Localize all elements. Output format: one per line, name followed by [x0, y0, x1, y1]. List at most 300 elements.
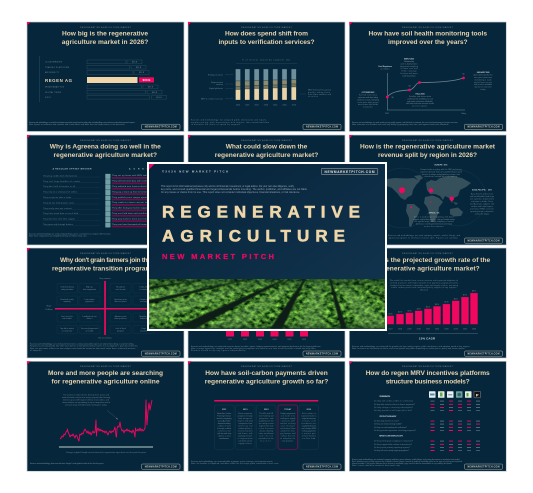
quadrant matrix: Uncertain price — [114, 298, 127, 301]
footnote: grain farmers: of adoption. — [30, 349, 42, 352]
line chart: tool improvement: $4 — [408, 86, 411, 88]
callout: Europe: corporate demand. Soil rules and food buyers push — [420, 170, 462, 173]
footnote: Agreena: Note: these comparisons are simplified and may not reflect every case. — [29, 234, 88, 238]
callout: Asia-Pacific: and lower MRV costs for — [470, 208, 494, 210]
timeline cards: farmers for storing — [218, 422, 231, 425]
footnote: spend shift: Sources and methodology: we analyzed public disclosures and reports, — [191, 119, 268, 122]
bar chart: market comparison: $XX B — [132, 62, 138, 64]
bar chart: market growth: 2034 — [454, 329, 458, 331]
footnote: grain farmers: Note: the placement reflects our own analysis and should be treated as directional rather than a statistical measure. — [30, 347, 136, 350]
quadrant matrix: Not so common — [98, 337, 112, 340]
panel: Agreena comparison — [27, 135, 184, 245]
heading: Agreena: Why is Agreena doing so well in the — [50, 144, 161, 151]
timeline cards: and service — [259, 434, 273, 438]
callout: October 2021: in practice. — [363, 106, 373, 109]
line chart: tool improvement: per 100ha — [381, 68, 390, 71]
callout: Asia-Pacific: across the region — [475, 212, 489, 216]
bar chart: market growth — [387, 291, 478, 340]
quadrant matrix: Too old to switch — [60, 327, 74, 330]
timeline cards: launches, beginning — [217, 418, 232, 420]
timeline cards — [214, 405, 318, 449]
comparison matrix: product and delivery: Do they use soil sampling for verification? — [374, 426, 407, 429]
timeline cards: 2023 — [264, 409, 269, 411]
quadrant matrix: Problem — [45, 308, 53, 311]
quadrant matrix: cash to start — [115, 288, 126, 291]
callout: Asia-Pacific: with smallholders and large — [470, 195, 494, 198]
stacked bar chart: spend by segment: Digital platforms — [209, 87, 223, 90]
quadrant matrix: Landlords do not — [82, 315, 97, 318]
text block: growth note: standard across major commodity crops and supply chains, assuming — [390, 284, 458, 287]
cover subtitle: NEW MARKET PITCH — [162, 252, 274, 261]
panel: grain farmers — [27, 248, 184, 358]
comparison matrix: target customer: Do they sell across many target geographies? — [374, 449, 409, 452]
comparison matrix: target customer — [374, 435, 480, 452]
timeline cards: clearer, drawing — [259, 430, 273, 432]
bar chart: market growth: 2036 — [472, 329, 476, 331]
legend band — [59, 446, 153, 448]
timeline cards: standards set, — [301, 422, 317, 425]
footnote: spend shift: supplier pricing, and conversations with farmers, then normalized data — [191, 121, 269, 124]
callout: October 2021: most farms and fields — [358, 103, 378, 106]
callout: Early 2023: for farms with more — [400, 72, 418, 75]
comparison matrix: product and delivery: Do they provide agronomic coaching programs? — [374, 429, 416, 432]
footnote: projected growth — [352, 345, 470, 350]
quadrant matrix: soil models — [62, 318, 72, 320]
comparison table: They don't talk to farmers at all — [43, 185, 76, 188]
footnote: business models: Each platform was scored against the attributes shown above, based on publicly available data at the time of writing and updated — [352, 460, 462, 463]
heading: business models: structure business models? — [386, 379, 470, 386]
bar chart: market growth: 2030 — [417, 329, 421, 331]
timeline cards: of how farmers — [302, 434, 316, 438]
timeline cards: reduce the risk — [281, 434, 295, 438]
callout: January 2026: and at lower prices — [474, 81, 492, 84]
callout: Europe: elsewhere, backed by public funding. — [424, 175, 458, 178]
quadrant matrix: after two years — [114, 300, 127, 303]
heading: business models — [366, 370, 490, 386]
timeline cards: pay farmers and — [280, 432, 295, 435]
timeline cards: verification from — [280, 427, 296, 430]
comparison table — [43, 168, 172, 227]
callout: Asia-Pacific: rice systems. Government — [470, 198, 494, 200]
timeline cards: payments per ton — [259, 420, 274, 422]
heading: obstacles: regenerative agriculture market? — [215, 152, 318, 159]
callout: Africa: by finance and fragmented land ownership — [416, 223, 452, 226]
quadrant matrix: payments — [85, 300, 94, 303]
comparison matrix: target customer: TARGET CUSTOMER & SCOPE — [379, 435, 404, 438]
bar chart: lower bars — [226, 325, 308, 341]
footnote: business models: Sources and methodology: we reviewed company websites, press releases, public filings, and pricing documents to evaluate each model. — [352, 458, 460, 461]
footnote: soil health: Note: estimates are rounded, and costs vary widely by geography, farm size, and required verification standards. — [352, 123, 450, 126]
panel: spend shift: REGENERATIVE AGRICULTURE MARKET — [241, 26, 293, 29]
bar chart: lower bars: 2025 — [287, 339, 292, 341]
comparison table: AGREENA — [129, 168, 157, 171]
quadrant matrix: unsuited — [140, 329, 147, 332]
stacked bar chart: spend by segment: 2021 — [245, 105, 249, 107]
stacked bar chart: spend by segment: from input vendors and — [308, 93, 331, 96]
comparison matrix: product and delivery: Do they help farmers to start? — [374, 420, 399, 423]
timeline cards: run their land. — [302, 437, 316, 440]
footnote: projected growth: Sources and methodology: we estimated the growth rate from market reports, public disclosures, and adoption trends in key regions. — [352, 345, 470, 348]
comparison table: They pay a share up front to farmers — [112, 190, 148, 193]
bar chart: market growth: $5 B — [444, 302, 449, 304]
panel: market size — [27, 22, 184, 132]
quadrant matrix: Don't trust the — [61, 315, 73, 318]
panel: spend shift — [188, 22, 345, 132]
timeline cards: buyers enter and — [259, 424, 273, 428]
comparison table: They credit at a lower cost per ton — [112, 201, 148, 204]
panel: regional revenue — [349, 135, 506, 245]
callout: Asia-Pacific: ASIA-PACIFIC · 25% — [472, 189, 492, 192]
bar chart: market comparison: DIGITAL TWINS — [45, 91, 62, 94]
quadrant matrix: No upfront — [116, 286, 125, 288]
button: website: NEWMARKETPITCH.COM — [306, 352, 338, 355]
callout: Early 2023: and in-field probes — [400, 62, 418, 65]
timeline cards: and stronger — [281, 424, 295, 428]
bar chart: market growth: 15% CAGR — [419, 336, 435, 340]
callout: Africa — [413, 212, 455, 228]
callout: Fall 2024: across regions. — [412, 105, 428, 108]
callout: Europe: Europe leads on policy with the CAP and strong — [420, 168, 462, 171]
stacked bar chart: spend by segment: Biological inputs — [208, 73, 223, 76]
photo: crop field — [149, 279, 385, 328]
panel: Agreena comparison: REGENERATIVE AGRICULTURE MARKET — [80, 139, 132, 142]
timeline cards: market. — [260, 440, 273, 442]
world map — [372, 168, 486, 228]
stacked bar chart: spend by segment: 2024 — [273, 105, 277, 107]
bar chart: market growth: 2027 — [388, 329, 393, 331]
bar chart: market growth: 2035 — [463, 329, 467, 331]
callout: Africa: across the continent. — [424, 225, 444, 228]
heading: soil-carbon: regenerative agriculture growth so far? — [205, 379, 328, 386]
timeline cards: Early corporate — [238, 412, 252, 415]
bar chart: market comparison: $XX B — [143, 78, 150, 82]
panel: market size: REGENERATIVE AGRICULTURE MARKET — [80, 26, 132, 29]
timeline cards: and cheaper MRV — [301, 427, 317, 430]
timeline cards: Today's payments — [280, 412, 295, 415]
quadrant matrix: Too much paperwork — [81, 327, 98, 330]
heading: regional revenue: How is the regenerative agriculture market — [360, 144, 496, 151]
comparison matrix: revenue model: Do they charge a recurring subscription? — [374, 406, 413, 409]
callout: Fall 2024: with faster and more accurate results — [406, 102, 434, 105]
comparison matrix: revenue model: Do they partner to sell input with a fee? — [374, 409, 412, 412]
footnote: market size — [29, 121, 136, 126]
footnote: grain farmers — [30, 343, 138, 352]
timeline cards: with low and slow — [217, 432, 232, 435]
footnote: projected growth: Note: forecasts are inherently uncertain, and actual growth may differ depending on carbon prices, policy and farmer uptake. — [352, 347, 465, 350]
stacked bar chart: spend by segment: 2022 — [254, 105, 259, 107]
text block: growth note — [390, 279, 458, 292]
button: website — [142, 124, 180, 129]
heading: grain farmers: Why don't grain farmers join the — [60, 257, 151, 264]
comparison table: They offer multi-year farmer support — [112, 207, 148, 210]
comparison matrix: product and delivery: PRODUCT & DELIVERY — [380, 416, 397, 418]
footnote: lower bars: Note: revenue figures are rounded, and the underlying assumptions are based on our view of each provider's model and may differ. — [191, 347, 316, 350]
comparison table: A REGULAR OFFSET BROKER — [52, 168, 92, 171]
callout: Early 2023: at lower cost and — [400, 67, 418, 70]
text block: search note: The market is often driven directly from press and — [63, 394, 109, 396]
callout: Fall 2024 — [406, 92, 434, 108]
callout: Europe: farmers to adopt verified practices faster than — [422, 173, 460, 176]
footnote: Agreena — [29, 232, 112, 238]
text block: growth note: We model the market from current revenue and expected adoption of — [390, 279, 458, 282]
heading: search interest: More and more people are searching — [48, 370, 163, 377]
heading: soil-carbon — [205, 370, 328, 386]
button: website — [142, 464, 180, 469]
stacked bar chart: spend by segment: 2023 — [264, 105, 268, 107]
button: website — [303, 351, 341, 356]
timeline cards: growing interest — [238, 434, 253, 438]
panel: market obstacles — [188, 135, 345, 245]
timeline cards: 2030 — [306, 409, 312, 411]
bar chart: market growth: 2033 — [444, 329, 449, 331]
footnote: spend shift: to estimate the share of spend by segment. — [191, 123, 242, 126]
timeline cards: a routine part — [302, 432, 316, 435]
panel: soil health monitoring: REGENERATIVE AGRICULTURE MARKET — [402, 26, 454, 29]
bar chart: market growth: 2028 — [398, 329, 402, 331]
line chart: tool improvement — [378, 65, 466, 115]
bar chart: lower bars: 2022 — [243, 339, 247, 341]
quadrant matrix: program — [117, 329, 124, 332]
timeline cards: 2019 — [243, 409, 248, 411]
footnote: lower bars: Sources and methodology: we estimated revenues based on public reports, funding announcements, and program disclosures for the largest platforms. — [191, 345, 322, 348]
heading: market size: How big is the regenerative — [62, 31, 148, 38]
comparison matrix: revenue model: Do they take revenue share on farmer payments? — [374, 403, 415, 406]
bar chart: market comparison: RFID — [45, 97, 52, 99]
callout: Fall 2024: and made verification affordable, — [407, 100, 433, 103]
timeline cards: and farms, with — [238, 432, 253, 435]
comparison matrix: revenue model: REVENUE MODEL — [380, 396, 391, 398]
heading: soil health: How have soil health monitoring tools — [369, 31, 487, 38]
bar chart: market comparison: $XX B — [156, 97, 162, 99]
cover title: REGENERATIVE — [162, 202, 360, 221]
heading: market size — [62, 31, 148, 46]
stacked bar chart: spend by segment: Regenerative — [211, 81, 223, 84]
footnote: market size: Sources and methodology: our model uses bottom-up market sizing based on public data, including filings, press releases and industry research reports. — [29, 121, 136, 124]
button: website: NEWMARKETPITCH.COM — [468, 126, 500, 129]
heading: market size: agriculture market in 2026? — [62, 39, 148, 46]
callout: Africa: support and carbon projects. Low soil health makes — [413, 218, 455, 221]
quadrant matrix: Lack of local — [115, 328, 126, 330]
button: cover website: NEWMARKETPITCH.COM — [324, 170, 375, 174]
disclaimer — [161, 185, 308, 194]
quadrant matrix: Trade-offs — [139, 286, 148, 288]
disclaimer: This report is for informational purposes only and is not financial, investment, or legal advice. Do your own due diligence, verify — [161, 185, 295, 188]
timeline cards: start funding soil — [259, 414, 274, 418]
cover kicker: ©2026 NEW MARKET PITCH — [162, 170, 228, 174]
cover title: AGRICULTURE — [162, 226, 345, 245]
line chart: tool improvement: Cost / Experience — [378, 65, 393, 68]
comparison table: They sell large bundles of credits — [43, 180, 80, 183]
quadrant matrix: early transition — [61, 288, 73, 291]
heading: business models: How do regen MRV incentives platforms — [366, 370, 490, 377]
bar chart: market comparison: $XX B — [152, 92, 158, 94]
bar chart: market growth: $4 B — [435, 304, 440, 306]
panel: grain farmers: REGENERATIVE AGRICULTURE MARKET — [80, 252, 132, 255]
button: cover website — [321, 168, 378, 174]
comparison table: They have weak data on each field — [43, 212, 78, 215]
callout: October 2021: Soil lab tests were — [359, 94, 377, 97]
quadrant matrix: Neighbors — [139, 315, 148, 318]
footnote: soil-carbon: Sources and methodology: we reviewed public programs, press coverage, and company reports. — [191, 460, 274, 463]
callout: October 2021: costs were high across — [358, 101, 379, 104]
timeline cards: expected to be a — [301, 414, 317, 418]
panel: revenue bars behind cover — [188, 248, 345, 358]
text block: search note: a broad range of food brands and buyers today. — [65, 404, 107, 406]
bar chart: market comparison: REGEN AG — [45, 78, 73, 83]
bar chart: market growth: $4 B — [426, 306, 431, 308]
heading: obstacles: What could slow down the — [226, 144, 308, 151]
timeline cards: providers to the — [259, 437, 274, 440]
callout: Early 2023 — [400, 58, 418, 77]
stacked bar chart: spend by segment: quickly, taking share — [308, 91, 330, 94]
callout: Fall 2024: combined with modelling cut cost — [407, 97, 433, 100]
heading: grain farmers — [52, 257, 159, 273]
footnote: regional revenue — [388, 234, 460, 239]
comparison table: They take fees with little support — [43, 218, 75, 221]
panel: soil-carbon timeline: REGENERATIVE AGRICULTURE MARKET — [241, 365, 293, 368]
disclaimer: key facts, and consult qualified financial and legal professionals before investing. The author, publisher, and affiliates are not liable — [161, 188, 308, 191]
timeline cards: The EU and US — [259, 413, 274, 415]
heading: spend shift — [218, 31, 314, 46]
line chart: tool improvement: $2 — [462, 74, 465, 76]
comparison table: They sell farm-level data with credits — [112, 180, 148, 183]
button: website — [303, 464, 341, 469]
quadrant matrix: front equipment — [83, 288, 97, 291]
timeline cards: through audited — [217, 427, 231, 430]
stacked bar chart: spend by segment: MRV & carbon services — [201, 97, 223, 100]
quadrant matrix: too long — [140, 300, 147, 303]
timeline cards: programs emerge — [238, 414, 253, 418]
callout: Early 2023: Remote sensing — [404, 60, 414, 63]
callout: Europe — [420, 165, 462, 178]
bar chart: market growth: $3 B — [407, 310, 412, 312]
comparison table: They publish price ranges openly — [112, 197, 148, 199]
timeline cards: are rising as new — [259, 422, 274, 425]
timeline cards: several markets — [238, 430, 253, 432]
footnote: search interest: Sources and methodology: data sourced from Google Trends global results for the last five years. — [30, 462, 104, 465]
line chart: search trend — [60, 400, 152, 441]
timeline cards: to pay Australian — [218, 420, 231, 422]
quadrant matrix: Advisors push — [115, 315, 126, 318]
button: website — [464, 464, 502, 469]
callout: Europe: EUROPE · 30% — [434, 165, 448, 167]
callout: Fall 2024: Satellite and sensor data — [409, 95, 432, 98]
panel: market obstacles: REGENERATIVE AGRICULTURE MARKET — [241, 139, 293, 142]
comparison table: They do not fund project costs — [43, 201, 74, 204]
bar chart: market comparison — [40, 56, 166, 102]
callout: October 2021: OCTOBER 2021 — [362, 92, 375, 94]
heading: regional revenue — [360, 144, 496, 159]
comparison table: They earn from thousands of farmers — [112, 223, 148, 226]
timeline cards: in regenerative — [238, 437, 253, 440]
timeline cards: uptake across — [218, 434, 231, 438]
panel: soil-carbon timeline — [188, 361, 345, 471]
callout: January 2026: now give continuous — [474, 76, 492, 79]
heading: search interest — [48, 370, 163, 386]
bar chart: market comparison: TRADING PLATFORMS — [45, 66, 70, 69]
button: website: NEWMARKETPITCH.COM — [145, 352, 177, 355]
panel: business models: REGENERATIVE AGRICULTURE MARKET — [402, 365, 454, 368]
button: website — [303, 124, 341, 129]
timeline cards: companies fund — [238, 423, 252, 425]
callout: Early 2023: land than before — [402, 74, 416, 77]
timeline cards: contracts, but — [218, 430, 231, 432]
text block: search note: conversations are spreading to input companies and to — [62, 401, 110, 404]
stacked bar chart: spend by segment: 2026 — [292, 105, 296, 107]
timeline cards: are built into — [281, 414, 295, 418]
quadrant matrix: other practices — [114, 317, 127, 320]
footnote: grain farmers: Responses were grouped by how often each barrier is mentioned and how severe it is on adoption in grain-focused farms. — [30, 345, 138, 348]
footnote: soil-carbon — [191, 460, 280, 465]
comparison table: They set prices after a trade — [43, 196, 71, 199]
bar chart: market growth: $8 B — [472, 291, 477, 293]
comparison matrix: revenue model — [374, 396, 480, 412]
stacked bar chart: spend by segment: % of market spend by segment (%) — [242, 59, 290, 62]
caption: search trend: Change in global Google search interest for regenerative agriculture over the past five years — [66, 451, 146, 454]
bar chart: market comparison: $XX B — [139, 72, 145, 74]
heading: regional revenue: revenue split by region in 2026? — [378, 152, 477, 159]
bar chart: market growth: $6 B — [454, 298, 458, 300]
heading: soil health — [369, 31, 487, 46]
heading: spend shift: inputs to verification services? — [218, 39, 314, 46]
quadrant matrix: to handle — [86, 329, 93, 332]
quadrant matrix: Low carbon — [85, 298, 94, 301]
quadrant matrix — [45, 277, 160, 340]
quadrant matrix: High up- — [86, 286, 93, 288]
panel: projected growth: REGENERATIVE AGRICULTURE MARKET — [402, 252, 454, 255]
text block: search note — [62, 394, 110, 406]
quadrant matrix: Yield risk during — [60, 286, 74, 288]
timeline cards: making payments — [302, 430, 316, 432]
comparison table: They rely on a small pool of sellers — [43, 191, 77, 194]
timeline cards: platforms that — [281, 430, 295, 432]
panel: search interest — [27, 361, 184, 471]
callout: Early 2023: EARLY 2023 — [404, 58, 415, 60]
callout: Asia-Pacific: schemes in India, China — [471, 201, 494, 203]
callout: Asia-Pacific: Asia-Pacific grows fast — [471, 192, 493, 196]
footnote: business models — [352, 458, 462, 467]
callout: Asia-Pacific: carbon with new buyers — [471, 205, 493, 208]
heading: search interest: for regenerative agriculture online — [52, 379, 160, 386]
timeline cards: regulated demand — [302, 424, 316, 428]
line chart: tool improvement: Today — [461, 113, 466, 115]
bar chart: market comparison: MOBILE ANALYTICS — [45, 86, 65, 89]
button: website: NEWMARKETPITCH.COM — [468, 465, 500, 468]
heading: grain farmers: regenerative transition programs? — [52, 266, 159, 273]
button: website — [464, 238, 502, 243]
heading: projected growth — [365, 257, 491, 273]
timeline cards: rules become — [259, 427, 274, 430]
heading: soil health: improved over the years? — [388, 39, 468, 46]
quadrant matrix: Major — [47, 304, 52, 308]
button: website — [464, 351, 502, 356]
text block: growth note: (Source) — [420, 289, 428, 292]
panel: search interest: REGENERATIVE AGRICULTURE MARKET — [80, 365, 132, 368]
heading: projected growth: What is the projected growth rate of the — [365, 257, 491, 264]
icon: corner mark — [149, 164, 154, 170]
button: website: NEWMARKETPITCH.COM — [306, 126, 338, 129]
timeline cards: of adoption for — [280, 437, 296, 440]
stacked bar chart: spend by segment: 2020 — [236, 105, 240, 107]
bar chart: market growth: 2031 — [426, 329, 430, 331]
line chart: tool improvement: $6 — [391, 97, 394, 99]
timeline cards: contracts, with — [281, 420, 295, 422]
panel: soil health monitoring — [349, 22, 506, 132]
bar chart: market growth: $3 B — [417, 308, 421, 310]
callout: October 2021: weeks for results. Sampling — [357, 98, 379, 101]
comparison matrix: target customer: Do they support both rotation and pastures? — [374, 443, 412, 446]
comparison matrix: product and delivery: Do they use remote sensing models? — [374, 423, 402, 426]
